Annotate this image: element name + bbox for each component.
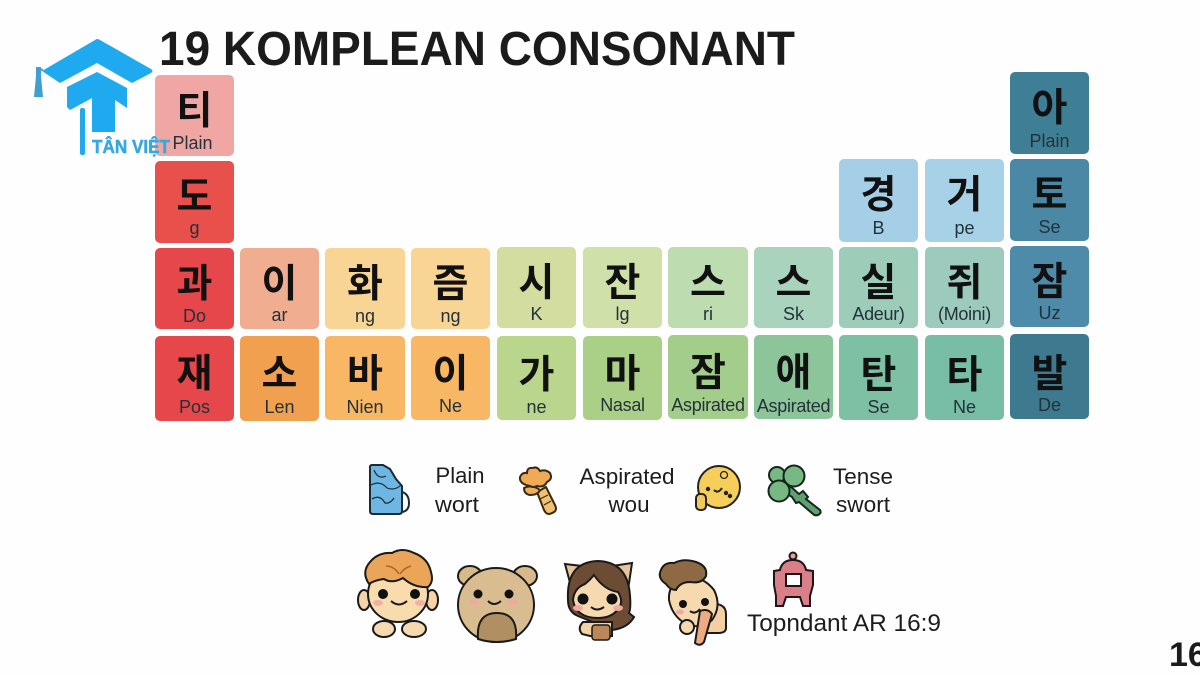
- cell: row 1 column 1: 티: [177, 80, 212, 136]
- cell: row 3 column 11: Uz: [1038, 303, 1060, 323]
- icon: yellow face: [696, 466, 740, 510]
- cell: row 4 column 6: Nasal: [600, 395, 645, 415]
- cell: row 3 column 1: 과: [177, 253, 212, 309]
- cell: row 2 column 11: 토: [1032, 164, 1067, 220]
- cell: row 3 column 3: 화: [347, 253, 383, 309]
- cell: row 4 column 9: 탄: [861, 344, 896, 400]
- cell: row 1 column 11: [1010, 72, 1089, 154]
- icon: orange flower brush: [520, 467, 556, 514]
- cell: row 3 column 9: Adeur): [852, 304, 905, 324]
- cell: row 2 column 11: [1010, 159, 1089, 241]
- cell: row 4 column 5: ne: [526, 397, 547, 417]
- cell: row 2 column 9: 경: [861, 164, 896, 220]
- panel: consonant table: [155, 72, 1089, 421]
- cell: row 3 column 1: [155, 248, 234, 329]
- cell: row 3 column 1: Do: [183, 306, 206, 326]
- cell: row 2 column 9: B: [872, 218, 884, 238]
- cell: row 3 column 4: [411, 248, 490, 329]
- cell: row 2 column 1: 도: [177, 166, 212, 222]
- label: plain wort: wort: [434, 492, 479, 517]
- icon: character girl: [565, 561, 634, 640]
- cell: row 4 column 5: [497, 336, 576, 420]
- cell: row 3 column 2: [240, 248, 319, 329]
- cell: row 4 column 3: Nien: [346, 397, 384, 417]
- cell: row 1 column 11: 아: [1032, 77, 1067, 133]
- cell: row 3 column 10: 쥐: [947, 252, 982, 308]
- cell: row 3 column 7: [668, 247, 748, 328]
- cell: row 1 column 1: [155, 75, 234, 156]
- cell: row 3 column 6: 잔: [605, 252, 640, 308]
- label: tense swort: Tense: [833, 464, 893, 489]
- cell: row 4 column 1: 재: [177, 343, 212, 399]
- cell: row 4 column 10: Ne: [953, 397, 976, 417]
- cell: row 3 column 11: [1010, 246, 1089, 327]
- cell: row 3 column 10: [925, 247, 1004, 328]
- cell: row 3 column 8: 스: [776, 252, 811, 308]
- cell: row 2 column 10: 거: [947, 164, 982, 220]
- cell: row 2 column 10: [925, 159, 1004, 242]
- cell: row 4 column 4: 이: [433, 343, 468, 399]
- cell: row 3 column 3: [325, 248, 405, 329]
- cell: row 4 column 2: Len: [264, 397, 295, 417]
- label: aspirated wou: wou: [607, 492, 650, 517]
- label: aspect note: Topndant AR 16:9: [747, 610, 941, 637]
- cell: row 4 column 1: [155, 336, 234, 421]
- cell: row 4 column 8: [754, 335, 833, 419]
- icon: pink gate: [774, 552, 813, 606]
- label: plain wort: Plain: [436, 463, 484, 488]
- icon: Tan Viet logo: [34, 39, 170, 157]
- title: 19 KOMPLEAN CONSONANT: [159, 23, 795, 76]
- icon: character boy: [358, 550, 438, 637]
- cell: row 1 column 11: Plain: [1029, 131, 1070, 151]
- cell: row 3 column 6: [583, 247, 662, 328]
- cell: row 3 column 9: [839, 247, 918, 328]
- cell: row 3 column 6: lg: [615, 304, 630, 324]
- cell: row 4 column 10: 타: [947, 344, 982, 400]
- cell: row 3 column 9: 실: [861, 252, 896, 308]
- label: aspirated wou: Aspirated: [580, 464, 674, 489]
- label: tense swort: swort: [836, 492, 890, 517]
- cell: row 3 column 8: [754, 247, 833, 328]
- cell: row 4 column 6: 마: [605, 343, 640, 399]
- cell: row 4 column 11: [1010, 334, 1089, 419]
- cell: row 4 column 9: Se: [867, 397, 890, 417]
- cell: row 2 column 10: pe: [954, 218, 975, 238]
- cell: row 4 column 2: 소: [262, 343, 297, 399]
- cell: row 4 column 11: 발: [1032, 343, 1067, 399]
- cell: row 4 column 3: 바: [347, 343, 383, 399]
- cell: row 1 column 1: Plain: [172, 133, 213, 153]
- cell: row 2 column 11: Se: [1038, 217, 1061, 237]
- cell: row 4 column 9: [839, 335, 918, 420]
- cell: row 4 column 3: [325, 336, 405, 420]
- cell: row 4 column 8: Aspirated: [757, 396, 830, 416]
- cell: row 2 column 1: [155, 161, 234, 243]
- cell: row 2 column 1: g: [189, 218, 200, 238]
- cell: row 4 column 10: [925, 335, 1004, 420]
- cell: row 4 column 5: 가: [519, 344, 554, 400]
- cell: row 4 column 4: [411, 336, 490, 420]
- label: tense swort: [833, 464, 893, 517]
- cell: row 4 column 7: [668, 335, 748, 419]
- cell: row 3 column 8: Sk: [783, 304, 804, 324]
- cell: row 4 column 2: [240, 336, 319, 421]
- label: aspirated wou: [580, 464, 674, 517]
- icon: Tan Viet logo: TÂN VIỆT: [92, 136, 170, 157]
- cell: row 4 column 4: Ne: [439, 396, 462, 416]
- cell: row 3 column 2: 이: [262, 253, 297, 309]
- cell: row 3 column 10: (Moini): [938, 304, 991, 324]
- cell: row 3 column 3: ng: [355, 306, 375, 326]
- icon: green clover wand: [768, 466, 821, 515]
- icon: plain sound mug: [370, 465, 409, 514]
- cell: row 4 column 8: 애: [776, 342, 811, 398]
- cell: row 3 column 11: 잠: [1032, 251, 1067, 307]
- cell: row 3 column 4: 즘: [433, 253, 468, 309]
- cell: row 3 column 7: 스: [690, 252, 726, 308]
- cell: row 3 column 5: 시: [519, 252, 554, 308]
- cell: row 4 column 6: [583, 336, 662, 420]
- cell: row 4 column 1: Pos: [179, 397, 210, 417]
- cell: row 3 column 5: K: [530, 304, 542, 324]
- icon: character with curly hair: [660, 560, 726, 645]
- cell: row 3 column 2: ar: [271, 305, 288, 325]
- label: plain wort: [434, 463, 484, 517]
- cell: row 4 column 7: Aspirated: [671, 395, 745, 415]
- cell: row 4 column 7: 잠: [690, 342, 726, 398]
- cell: row 3 column 5: [497, 247, 576, 328]
- cell: row 2 column 9: [839, 159, 918, 242]
- cell: row 4 column 11: De: [1038, 395, 1061, 415]
- icon: character bear: [458, 566, 537, 642]
- cell: row 3 column 7: ri: [703, 304, 713, 324]
- cell: row 3 column 4: ng: [440, 306, 461, 326]
